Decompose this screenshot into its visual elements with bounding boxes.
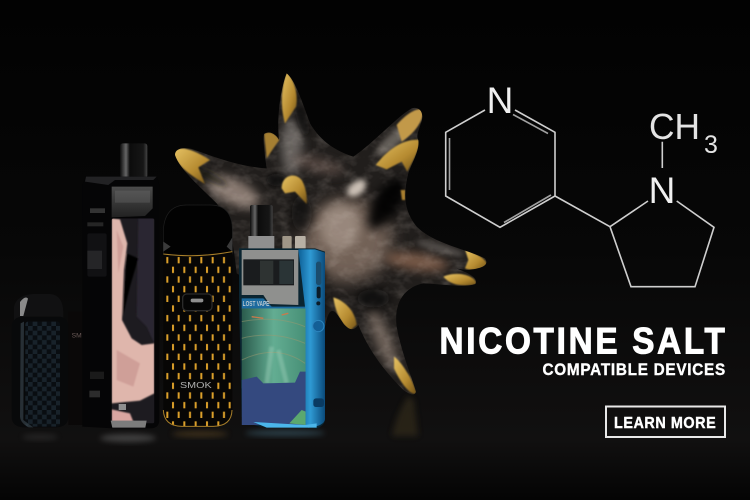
pyrrolidine nitrogen: N [649, 170, 675, 211]
device: small carbon pod [12, 294, 83, 427]
star sculpture [170, 70, 490, 397]
device label: LOST VAPE: LOST VAPE [243, 299, 269, 308]
dark shadows [184, 96, 413, 323]
wood panel [112, 218, 154, 423]
device: blue pod [239, 205, 325, 428]
device label: SM: SM [72, 332, 82, 339]
device: gold-dotted pod [163, 205, 232, 427]
gold tips [173, 72, 487, 394]
wood panel [242, 308, 306, 425]
device: gold-dotted pod: SMOK [180, 380, 212, 390]
methyl subscript: 3 [704, 131, 718, 159]
banner [0, 74, 750, 458]
pyrrolidine ring [555, 142, 714, 287]
button: learn more: LEARN MORE [614, 414, 716, 432]
methyl group: CH [649, 106, 700, 147]
floor light [22, 396, 418, 442]
device label: SMOK [179, 379, 213, 390]
button: learn more [606, 406, 725, 437]
spike and body highlights [170, 70, 490, 397]
subheading: COMPATIBLE DEVICES [542, 360, 725, 379]
pyridine ring [446, 110, 555, 227]
device: tall stabilized-wood pod [82, 143, 159, 428]
heading: NICOTINE SALT [440, 321, 725, 362]
vape devices [12, 143, 325, 428]
nicotine molecule diagram [446, 80, 718, 287]
ring nitrogen: N [487, 80, 513, 121]
